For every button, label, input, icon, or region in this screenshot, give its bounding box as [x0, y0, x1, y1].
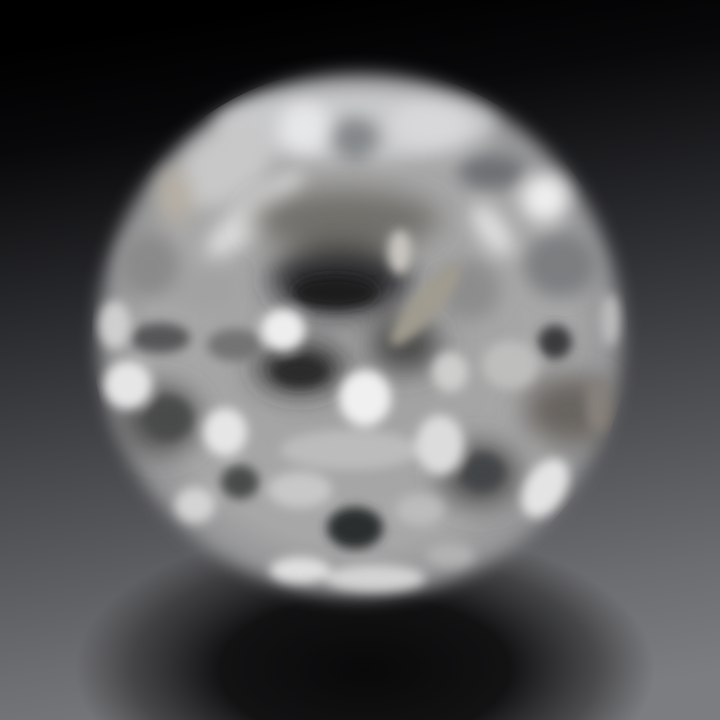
upper crown facets: [120, 89, 596, 320]
diamond: [98, 73, 622, 597]
mid facets: [99, 230, 619, 591]
diamond shadow: [0, 500, 720, 720]
central dark pavilion: [120, 190, 616, 507]
diamond body: [98, 73, 622, 597]
